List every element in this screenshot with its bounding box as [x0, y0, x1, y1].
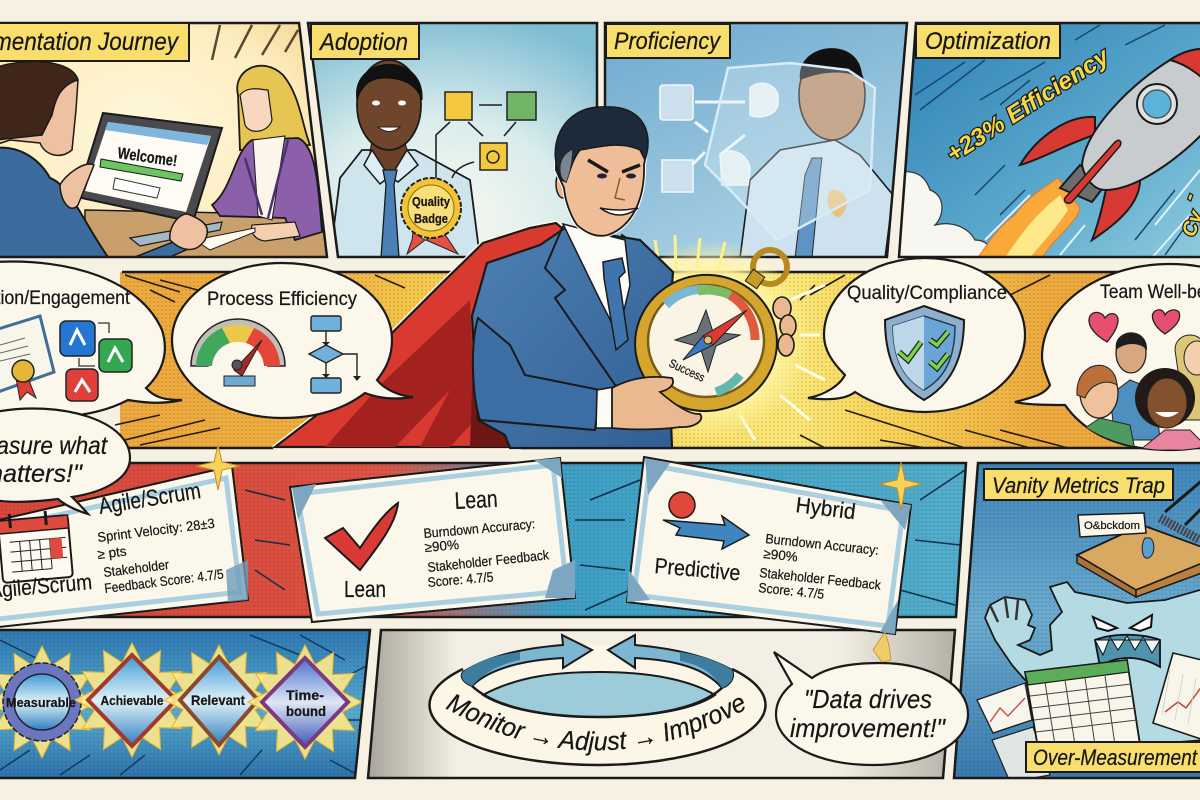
badge: measurable	[0, 646, 98, 758]
icon: flowchart	[309, 316, 361, 393]
tablet	[77, 113, 222, 222]
badge: relevant	[164, 645, 274, 755]
icon: gauge	[191, 319, 285, 386]
icon: hearts	[1089, 310, 1180, 342]
panel: vanity metrics	[954, 463, 1200, 782]
card: agile scrum: Stakeholder	[103, 557, 170, 580]
card: hybrid: Predictive	[654, 553, 741, 585]
icon: certificate	[0, 316, 54, 400]
card: agile scrum: Agile/Scrum	[97, 477, 203, 519]
spreadsheet	[1025, 660, 1140, 748]
fingers	[773, 297, 796, 356]
cape	[275, 223, 658, 447]
icon: workflow blocks	[436, 92, 536, 180]
tablet: Welcome!	[116, 145, 178, 170]
panel: adoption	[308, 23, 597, 258]
callout: efficiency: +23% Efficiency	[942, 42, 1115, 168]
badge: time-bound: bound	[286, 703, 326, 719]
callout: data drives improvement: "Data drives	[804, 684, 932, 714]
callout: data drives improvement: improvement!"	[790, 713, 947, 743]
flame	[975, 178, 1080, 262]
loop ring	[428, 633, 767, 766]
card: lean: Lean	[454, 486, 498, 515]
compass	[626, 250, 787, 420]
card: agile scrum	[0, 466, 248, 628]
sparkle: hybrid card	[880, 462, 922, 510]
card: hybrid: Burndown Accuracy:	[765, 531, 880, 558]
man with tablet	[0, 62, 207, 257]
card: lean: Burndown Accuracy:	[423, 516, 536, 541]
card: lean: Stakeholder Feedback	[427, 547, 550, 575]
arm	[473, 318, 614, 430]
bubble: process efficiency: Process Efficiency	[207, 289, 357, 310]
mousetrap	[1077, 478, 1200, 597]
chart sheet: left	[977, 683, 1032, 733]
compass: Success	[667, 356, 707, 385]
callout: data drives improvement	[774, 652, 968, 765]
card: hybrid: Score: 4.7/5	[758, 580, 825, 602]
chart sheet: right	[1153, 653, 1200, 742]
icon: calendar	[0, 509, 73, 583]
badge: time-bound: Time-	[286, 687, 324, 703]
sparkle: agile card	[196, 445, 240, 490]
bubble: quality compliance: Quality/Compliance	[847, 283, 1007, 304]
shield: translucent	[705, 63, 875, 240]
icon: ball and arrow	[663, 492, 749, 549]
bubble: quality compliance	[808, 258, 1025, 412]
monster	[985, 582, 1200, 745]
sparkle: hybrid card bottom	[873, 632, 891, 662]
panel: monitor loop	[366, 628, 956, 780]
icon: faded workflow	[660, 83, 778, 192]
icon: shield	[885, 306, 964, 400]
suit	[472, 228, 673, 448]
title: optimization: Optimization	[925, 28, 1051, 55]
cloud	[899, 172, 995, 257]
icon: app tiles	[60, 321, 132, 401]
badge: measurable: Measurable	[6, 695, 76, 710]
people	[1077, 332, 1200, 450]
card: hybrid: Hybrid	[794, 492, 857, 524]
card: hybrid: Stakeholder Feedback	[759, 565, 882, 593]
sheet: lower left	[992, 727, 1050, 782]
badge: achievable: Achievable	[100, 693, 164, 708]
desk	[85, 210, 330, 258]
panel: burst band	[115, 272, 1200, 448]
panel: optimization	[899, 23, 1200, 262]
arrow: left	[462, 635, 592, 686]
card: agile scrum: ≥ pts	[97, 544, 128, 562]
hero character with compass	[275, 107, 810, 448]
card: agile scrum: Feedback Score: 4.7/5	[104, 566, 224, 596]
card: lean: Lean	[344, 576, 386, 602]
compass glow	[610, 240, 810, 440]
rocket	[1020, 49, 1200, 240]
card: lean: Score: 4.7/5	[427, 569, 494, 590]
title: implementation journey	[0, 23, 189, 61]
card: lean	[290, 458, 575, 622]
badge: quality badge	[401, 178, 461, 254]
panel: methodology band	[0, 463, 966, 617]
panel: implementation journey	[0, 23, 330, 258]
card: agile scrum: Sprint Velocity: 28±3	[97, 516, 215, 545]
glow spikes	[655, 235, 725, 272]
title: adoption	[311, 24, 419, 59]
person: adoption	[330, 60, 480, 258]
bubble: process efficiency	[172, 263, 413, 418]
person: proficiency	[740, 48, 893, 258]
panel: smart goals	[0, 630, 370, 778]
card: hybrid: ≥90%	[763, 546, 799, 565]
shirt and tie	[545, 224, 630, 392]
callout: measure what matters	[0, 409, 130, 514]
title: vanity metrics trap: Vanity Metrics Trap	[992, 473, 1165, 498]
title: proficiency: Proficiency	[614, 28, 722, 55]
card: hybrid	[627, 457, 911, 634]
loop label: Monitor → Adjust → Improve	[446, 694, 745, 756]
woman	[130, 66, 322, 250]
badge: quality badge: Quality	[412, 194, 451, 209]
title: adoption: Adoption	[318, 29, 408, 56]
head	[555, 107, 648, 236]
icon: check mark	[325, 503, 398, 570]
badge: time-bound	[248, 645, 362, 759]
panel: proficiency	[605, 23, 907, 258]
badge: achievable	[75, 643, 189, 757]
card: lean: ≥90%	[424, 537, 460, 555]
arrow: right	[608, 635, 733, 688]
sheet behind monster	[1180, 633, 1200, 660]
badge: relevant: Relevant	[191, 692, 245, 708]
hand	[612, 377, 701, 429]
badge: quality badge: Badge	[414, 211, 448, 226]
mousetrap: O&bckdom	[1084, 520, 1140, 532]
bubble: adoption engagement	[0, 262, 182, 417]
bubble: team well-being	[1015, 264, 1200, 450]
